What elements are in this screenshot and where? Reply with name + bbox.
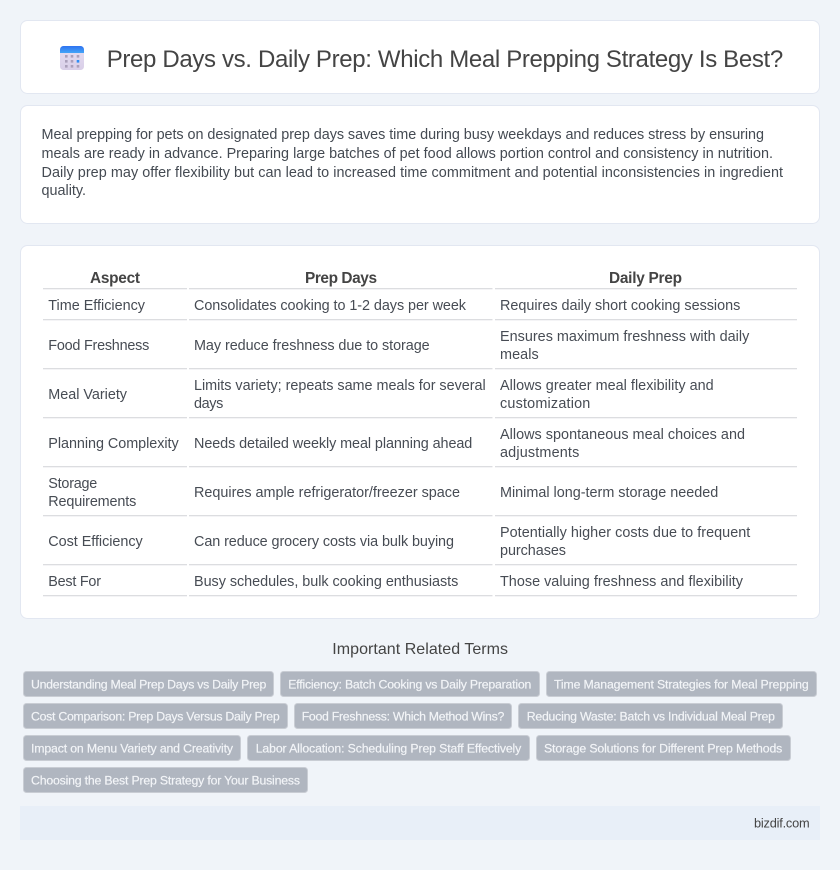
related terms heading: Important Related Terms <box>332 641 508 658</box>
footer source: bizdif.com <box>754 815 810 830</box>
table header row <box>90 270 682 287</box>
tag <box>546 672 816 696</box>
tag <box>24 704 288 728</box>
tag: Cost Comparison: Prep Days Versus Daily Prep <box>31 709 280 723</box>
comparison table panel <box>20 246 820 618</box>
intro text: meals are ready in advance. Preparing large batches of pet food allows portion control and consistency in nutrition. <box>42 146 773 162</box>
icon: calendar <box>60 46 84 70</box>
intro panel <box>20 106 820 224</box>
row: best for: Busy schedules, bulk cooking enthusiasts <box>194 574 458 590</box>
row: planning complexity <box>48 427 745 461</box>
row: food freshness: May reduce freshness due to storage <box>194 338 430 354</box>
footer bar <box>20 806 820 840</box>
row: best for: Best For <box>48 574 101 590</box>
table rules <box>43 288 797 596</box>
tag <box>518 704 782 728</box>
intro text: quality. <box>42 183 86 199</box>
related terms tags <box>24 672 816 792</box>
title: Prep Days vs. Daily Prep: Which Meal Prepping Strategy Is Best? <box>107 46 783 73</box>
row: meal variety <box>48 378 714 412</box>
row: time efficiency: Time Efficiency <box>48 298 146 314</box>
row: best for <box>48 574 744 590</box>
row: cost efficiency: Potentially higher costs due to frequent <box>500 525 750 541</box>
tag: Impact on Menu Variety and Creativity <box>31 741 234 755</box>
row: meal variety: days <box>194 396 223 412</box>
row: food freshness: Ensures maximum freshness with daily <box>500 329 750 345</box>
row: storage requirements <box>48 476 718 510</box>
row: food freshness: meals <box>500 347 539 363</box>
row: time efficiency <box>48 298 740 314</box>
row: planning complexity: adjustments <box>500 445 579 461</box>
tag <box>24 672 274 696</box>
row: food freshness <box>48 329 750 363</box>
row: storage requirements: Requires ample refrigerator/freezer space <box>194 485 460 501</box>
table header row: Daily Prep <box>609 270 682 287</box>
row: food freshness: Food Freshness <box>48 338 149 354</box>
tag <box>24 736 240 760</box>
row: meal variety: Allows greater meal flexibility and <box>500 378 714 394</box>
tag <box>248 736 530 760</box>
tag: Efficiency: Batch Cooking vs Daily Preparation <box>288 677 531 691</box>
tag: Food Freshness: Which Method Wins? <box>302 709 504 723</box>
row: planning complexity: Planning Complexity <box>48 436 179 452</box>
row: time efficiency: Consolidates cooking to 1-2 days per week <box>194 298 467 314</box>
row: storage requirements: Minimal long-term storage needed <box>500 485 718 501</box>
row: cost efficiency <box>48 525 750 559</box>
intro text: Daily prep may offer flexibility but can lead to increased time commitment and potential inconsistencies in ingredient <box>42 165 783 181</box>
row: cost efficiency: Can reduce grocery costs via bulk buying <box>194 534 454 550</box>
tag: Time Management Strategies for Meal Prepping <box>554 677 809 691</box>
tag: Choosing the Best Prep Strategy for Your Business <box>31 773 300 787</box>
intro text: Meal prepping for pets on designated prep days saves time during busy weekdays and reduces stress by ensuring <box>42 127 764 143</box>
row: meal variety: customization <box>500 396 590 412</box>
row: planning complexity: Allows spontaneous meal choices and <box>500 427 745 443</box>
row: cost efficiency: purchases <box>500 543 566 559</box>
tag <box>294 704 512 728</box>
tag: Reducing Waste: Batch vs Individual Meal Prep <box>527 709 775 723</box>
row: storage requirements: Storage <box>48 476 97 492</box>
header panel <box>20 20 820 94</box>
intro text <box>42 127 783 199</box>
table header row: Aspect <box>90 270 140 287</box>
tag <box>536 736 790 760</box>
tag <box>280 672 540 696</box>
tag: Understanding Meal Prep Days vs Daily Prep <box>31 677 266 691</box>
row: meal variety: Meal Variety <box>48 387 128 403</box>
row: planning complexity: Needs detailed weekly meal planning ahead <box>194 436 472 452</box>
row: storage requirements: Requirements <box>48 494 136 510</box>
row: time efficiency: Requires daily short cooking sessions <box>500 298 740 314</box>
tag: Storage Solutions for Different Prep Methods <box>544 741 782 755</box>
tag: Labor Allocation: Scheduling Prep Staff Effectively <box>256 741 522 755</box>
row: cost efficiency: Cost Efficiency <box>48 534 143 550</box>
row: meal variety: Limits variety; repeats same meals for several <box>194 378 486 394</box>
table header row: Prep Days <box>305 270 377 287</box>
row: best for: Those valuing freshness and flexibility <box>500 574 744 590</box>
tag <box>24 768 308 792</box>
